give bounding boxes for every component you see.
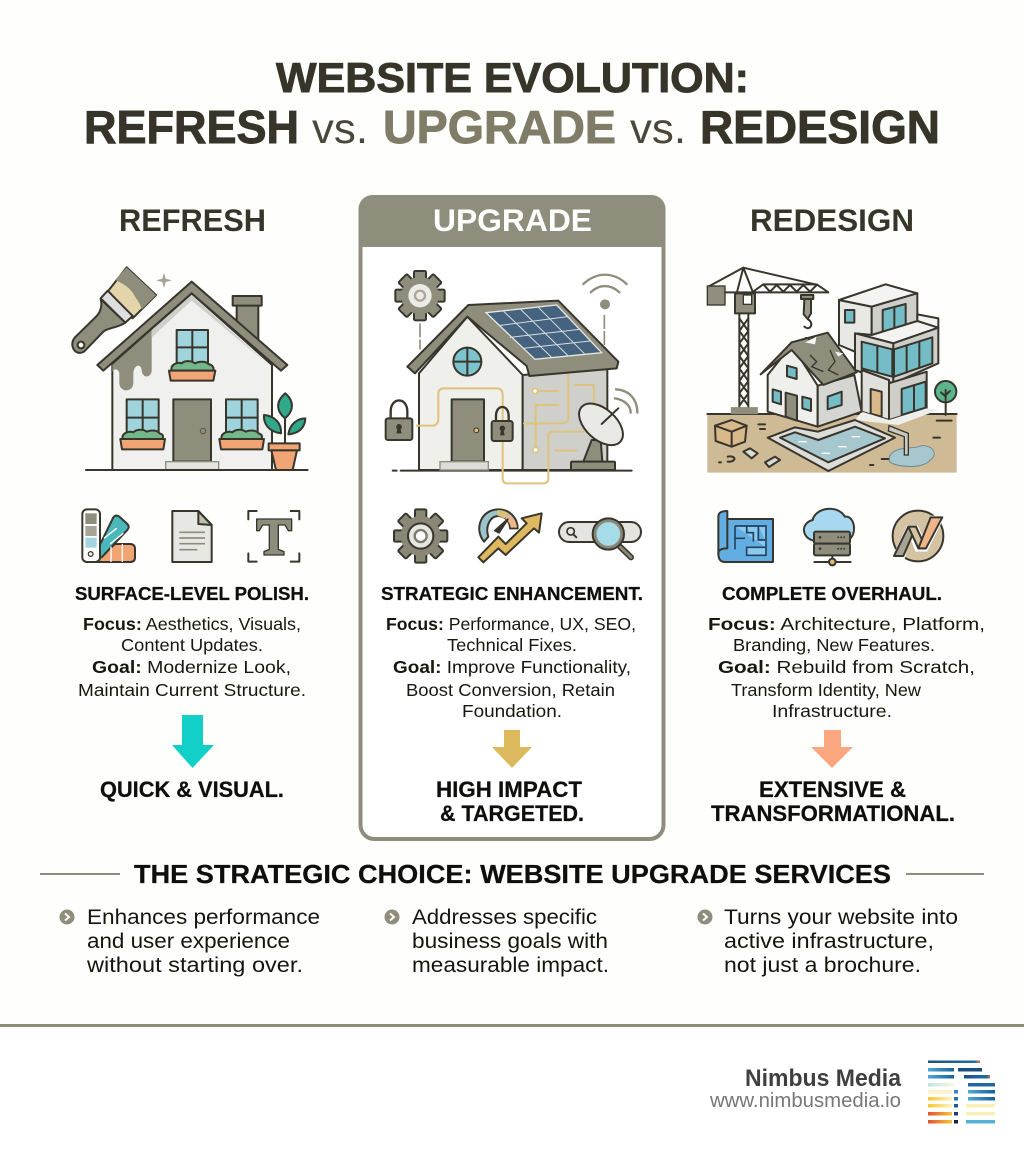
outcome: upgrade: HIGH IMPACT	[436, 777, 583, 802]
benefit 3: not just a brochure.	[724, 953, 921, 977]
icon: new brand mark	[893, 511, 943, 561]
text block: refresh	[75, 583, 309, 700]
benefit 2: measurable impact.	[412, 953, 609, 977]
text block: refresh: Focus: Aesthetics, Visuals,	[83, 614, 301, 634]
text block: redesign	[708, 583, 985, 721]
icon: gear	[394, 509, 447, 563]
logo: striped mark	[928, 1060, 995, 1124]
text block: redesign: Goal: Rebuild from Scratch,	[718, 657, 975, 677]
benefit 2: Addresses specific	[412, 905, 597, 929]
icon: search bar with magnifier	[559, 518, 641, 557]
title: REDESIGN	[700, 101, 940, 153]
heading: upgrade: UPGRADE	[433, 202, 592, 238]
benefit 2: business goals with	[412, 929, 608, 953]
benefit 1: without starting over.	[86, 953, 303, 977]
illustration: redesign construction site	[707, 268, 957, 473]
benefit 3	[698, 905, 958, 977]
icon: blueprint	[718, 511, 773, 562]
text block: upgrade: STRATEGIC ENHANCEMENT.	[381, 583, 643, 604]
footer brand name	[709, 1065, 901, 1112]
title: WEBSITE EVOLUTION:	[276, 54, 749, 101]
title: REFRESH	[84, 101, 299, 153]
text block: redesign: Infrastructure.	[772, 701, 892, 721]
title	[84, 54, 940, 153]
benefit 1: Enhances performance	[87, 905, 320, 929]
footer brand name: Nimbus Media	[745, 1065, 901, 1092]
text block: refresh: SURFACE-LEVEL POLISH.	[75, 583, 309, 604]
text block: refresh: Goal: Modernize Look,	[92, 657, 291, 677]
outcome: refresh: QUICK & VISUAL.	[100, 777, 284, 802]
text block: redesign: Branding, New Features.	[733, 635, 935, 655]
icon: colour swatches	[82, 509, 135, 562]
text block: upgrade: Boost Conversion, Retain	[406, 680, 615, 700]
text block: refresh: Content Updates.	[121, 635, 263, 655]
illustration: repainted house	[72, 267, 308, 470]
benefit 1: and user experience	[87, 929, 290, 953]
outcome: upgrade: & TARGETED.	[440, 801, 584, 826]
icon: cloud server	[804, 509, 854, 565]
benefit 2	[384, 905, 609, 977]
icon: typography	[248, 511, 299, 562]
text block: redesign: Transform Identity, New	[731, 680, 921, 700]
arrow: refresh	[172, 715, 214, 768]
text block: upgrade	[381, 583, 643, 721]
arrow: redesign	[811, 730, 853, 768]
text block: upgrade: Goal: Improve Functionality,	[393, 657, 631, 677]
text block: refresh: Maintain Current Structure.	[78, 680, 306, 700]
outcome: redesign: TRANSFORMATIONAL.	[711, 801, 955, 826]
text block: upgrade: Foundation.	[462, 701, 562, 721]
text block: upgrade: Technical Fixes.	[447, 635, 577, 655]
title: vs.	[312, 105, 368, 153]
text block: upgrade: Focus: Performance, UX, SEO,	[386, 614, 636, 634]
text block: redesign: Focus: Architecture, Platform,	[708, 614, 985, 634]
outcome: redesign	[711, 777, 955, 826]
benefit 3: active infrastructure,	[724, 929, 934, 953]
title: UPGRADE	[383, 101, 616, 153]
text block: redesign: COMPLETE OVERHAUL.	[722, 583, 942, 604]
section heading: strategic choice: THE STRATEGIC CHOICE: WEBSITE UPGRADE SERVICES	[134, 859, 891, 889]
heading: refresh: REFRESH	[119, 202, 266, 238]
outcome: upgrade	[436, 777, 584, 826]
arrow: upgrade	[492, 730, 532, 768]
outcome: redesign: EXTENSIVE &	[759, 777, 906, 802]
benefit 3: Turns your website into	[724, 905, 958, 929]
illustration: upgraded smart house	[386, 271, 637, 483]
heading: redesign: REDESIGN	[750, 202, 914, 238]
footer brand name: www.nimbusmedia.io	[709, 1090, 901, 1112]
icon: document	[172, 511, 212, 562]
panel: upgrade highlight	[358, 195, 666, 839]
icon: speed gauge and growth arrow	[478, 509, 542, 562]
title: vs.	[630, 105, 686, 153]
benefit 1	[60, 905, 320, 977]
